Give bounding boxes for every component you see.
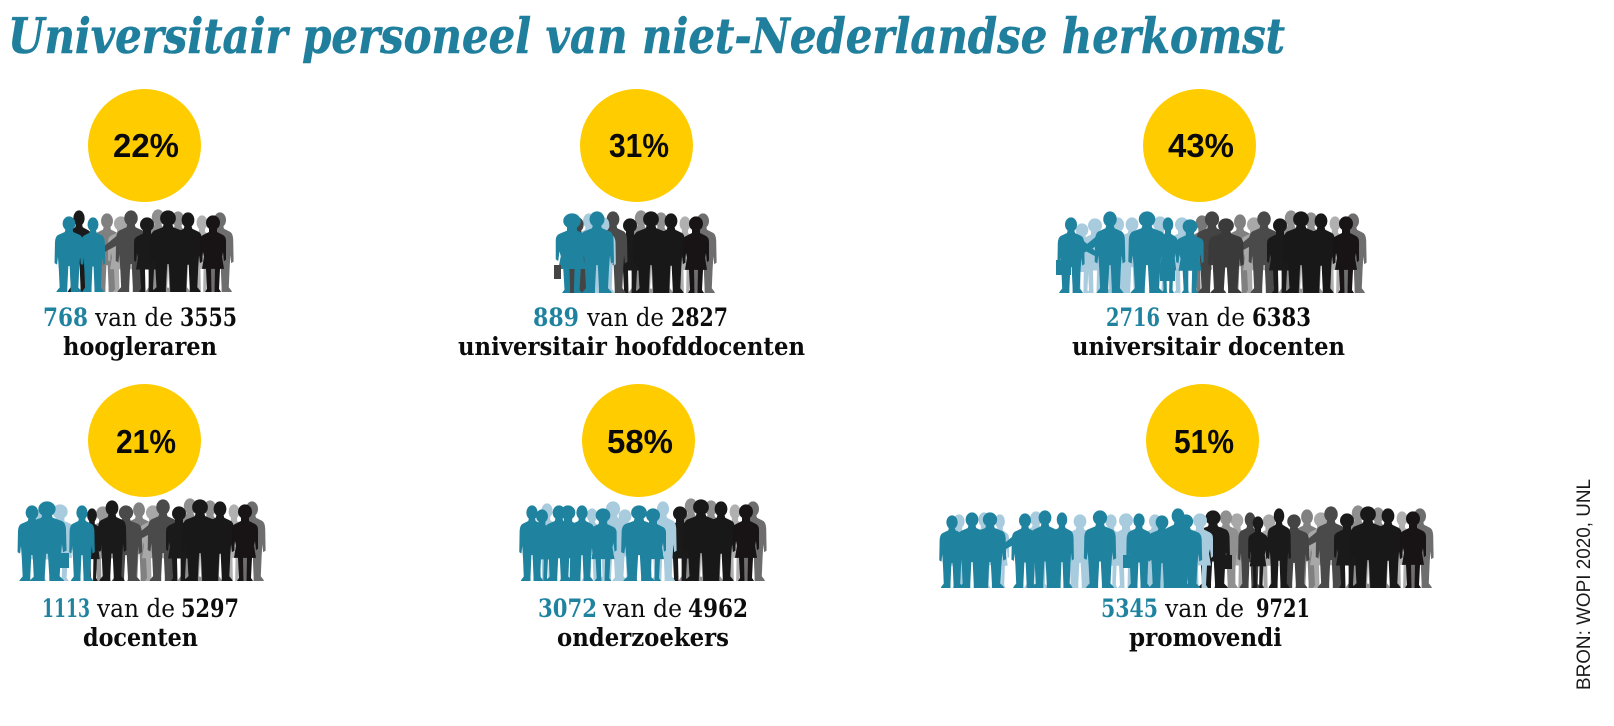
percentage badge 51% [1146, 384, 1259, 497]
percentage badge 21% [88, 384, 201, 497]
percentage badge 31%: 31% [609, 127, 669, 164]
label: 1113 van de 5297 docenten: van de [96, 594, 175, 623]
label: 1113 van de 5297 docenten: docenten [83, 623, 198, 652]
label: 5345 van de 9721 promovendi: promovendi [1129, 623, 1282, 652]
label: 1113 van de 5297 docenten: 1113 [42, 594, 90, 623]
percentage badge 58%: 58% [607, 423, 673, 460]
label: 768 van de 3555 hoogleraren: 3555 [180, 303, 237, 332]
crowd: docenten [18, 498, 266, 581]
percentage badge 31% [580, 89, 693, 202]
label: 3072 van de 4962 onderzoekers: onderzoekers [557, 623, 729, 652]
label: 2716 van de 6383 universitair docenten: 2716 [1106, 303, 1160, 332]
panel: onderzoekers [519, 384, 767, 652]
panel: universitair hoofddocenten [458, 89, 805, 361]
label: 2716 van de 6383 universitair docenten [1072, 303, 1345, 361]
percentage badge 21%: 21% [116, 423, 176, 460]
label: 2716 van de 6383 universitair docenten: van de [1166, 303, 1245, 332]
label: 5345 van de 9721 promovendi: 5345 [1101, 594, 1158, 623]
label: 889 van de 2827 universitair hoofddocenten [458, 303, 805, 361]
label: 5345 van de 9721 promovendi: 9721 [1256, 594, 1310, 623]
label: 889 van de 2827 universitair hoofddocenten: van de [586, 303, 664, 332]
label: 768 van de 3555 hoogleraren: 768 [43, 303, 88, 332]
label: 3072 van de 4962 onderzoekers: van de [602, 594, 682, 623]
label: 3072 van de 4962 onderzoekers: 4962 [688, 594, 748, 623]
title: Universitair personeel van niet-Nederlandse herkomst [8, 7, 1285, 65]
percentage badge 51%: 51% [1174, 423, 1234, 460]
source note: BRON: WOPI 2020, UNL [1574, 479, 1595, 690]
label: 3072 van de 4962 onderzoekers [538, 594, 748, 652]
percentage badge 43% [1143, 89, 1256, 202]
label: 768 van de 3555 hoogleraren [43, 303, 237, 361]
label: 5345 van de 9721 promovendi: van de [1164, 594, 1244, 623]
crowd: universitair hoofddocenten [554, 210, 717, 293]
label: 2716 van de 6383 universitair docenten: universitair docenten [1072, 332, 1345, 361]
label: 1113 van de 5297 docenten [42, 594, 239, 652]
label: 3072 van de 4962 onderzoekers: 3072 [538, 594, 597, 623]
percentage badge 58% [582, 384, 695, 497]
crowd: onderzoekers [519, 498, 767, 581]
label: 2716 van de 6383 universitair docenten: 6383 [1252, 303, 1311, 332]
label: 889 van de 2827 universitair hoofddocenten: 2827 [671, 303, 728, 332]
label: 768 van de 3555 hoogleraren: hoogleraren [63, 332, 217, 361]
percentage badge 22%: 22% [113, 127, 179, 164]
crowd: universitair docenten [1056, 210, 1367, 293]
panel: promovendi [939, 384, 1434, 652]
crowd: promovendi [939, 505, 1434, 588]
label: 5345 van de 9721 promovendi [1101, 594, 1310, 652]
label: 889 van de 2827 universitair hoofddocenten: universitair hoofddocenten [458, 332, 805, 361]
panel: docenten [18, 384, 266, 652]
percentage badge 43%: 43% [1168, 127, 1234, 164]
crowd: hoogleraren [55, 209, 234, 292]
label: 889 van de 2827 universitair hoofddocenten: 889 [533, 303, 579, 332]
label: 768 van de 3555 hoogleraren: van de [94, 303, 173, 332]
panel: hoogleraren [43, 89, 237, 361]
percentage badge 22% [88, 89, 201, 202]
panel: universitair docenten [1056, 89, 1367, 361]
label: 1113 van de 5297 docenten: 5297 [181, 594, 239, 623]
